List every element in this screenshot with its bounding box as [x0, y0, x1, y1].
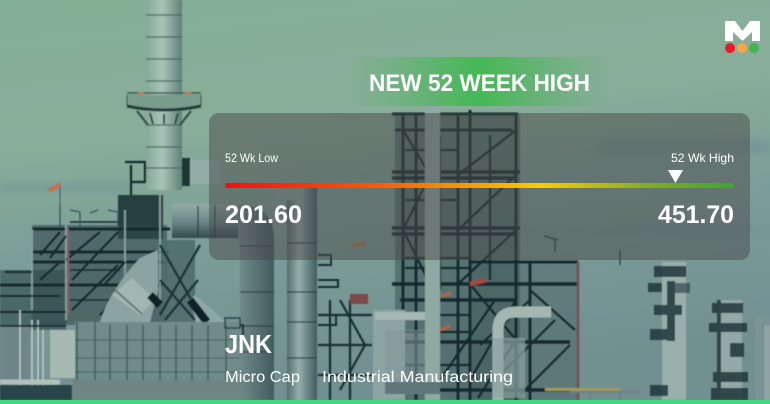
windsock [47, 182, 60, 192]
banner heading: NEW 52 WEEK HIGH [369, 70, 590, 97]
condenser block [0, 310, 242, 400]
background: haze clouds [0, 140, 770, 235]
lower middle block between pipes and tower [318, 300, 435, 400]
bottom accent strip [0, 400, 770, 404]
banner: new 52 week high [351, 57, 608, 106]
central column and pipes [350, 90, 640, 400]
logo [725, 21, 760, 53]
pipe side gantries [228, 255, 338, 340]
company ticker: JNK [225, 329, 272, 359]
right tall pipe [287, 185, 317, 400]
panel: 52 week range [209, 113, 750, 260]
main stack [127, 0, 220, 190]
range bar [225, 183, 734, 188]
lattice structure [0, 162, 170, 330]
stack platform [127, 92, 201, 125]
marker triangle [668, 170, 683, 183]
diagonal bracing and hoppers [100, 240, 226, 322]
market cap tag: Micro Cap [225, 369, 300, 386]
sector tag: Industrial Manufacturing [322, 369, 513, 386]
left curved pipe [172, 205, 274, 400]
central right tower [392, 110, 578, 400]
label: 52 wk low: 52 Wk Low [225, 151, 278, 165]
value: high price: 451.70 [658, 201, 734, 229]
value: low price: 201.60 [225, 201, 302, 229]
duct connector [182, 158, 190, 186]
far right towers [648, 262, 770, 400]
horizontal duct with bend [186, 165, 304, 200]
label: 52 wk high: 52 Wk High [671, 151, 734, 165]
